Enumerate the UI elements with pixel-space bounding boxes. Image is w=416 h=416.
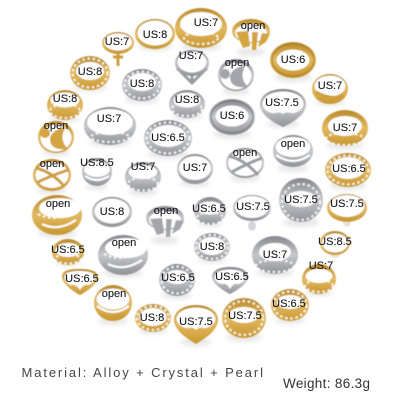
ring: silver US:7 cross pendant (175, 50, 209, 83)
ring: gold open wrap (33, 158, 71, 194)
ring: silver US:6.5 crown: US:6.5 (161, 272, 195, 284)
ring: silver open leaf: open (112, 237, 136, 249)
ring: gold US:8.5 pearl (318, 231, 352, 258)
ring: gold US:6.5 V shape (62, 269, 99, 295)
ring: silver open moon: open (225, 57, 249, 69)
ring: silver US:7 cross pendant: US:7 (179, 50, 203, 62)
ring: silver open double band: open (281, 138, 305, 150)
ring: silver US:6 wide band: US:6 (220, 110, 244, 122)
ring: silver US:8 crown (194, 233, 230, 263)
ring: gold US:6.5 crown: US:6.5 (272, 298, 306, 310)
ring: silver US:7 chain band (252, 236, 298, 277)
ring: silver US:8.5 (80, 157, 114, 190)
ring: silver US:7: US:7 (183, 162, 207, 174)
ring: gold open leaf (32, 195, 82, 238)
ring: gold US:8.5 pearl: US:8.5 (318, 236, 352, 248)
ring: silver open moon (218, 57, 254, 95)
ring: silver US:7 crown: US:7 (131, 161, 155, 173)
ring: silver US:8 thin: US:8 (100, 206, 124, 218)
ring: silver US:7: US:7 (97, 113, 121, 125)
ring: silver open leaf (98, 235, 148, 278)
ring: silver US:6.5 V shape (212, 267, 249, 294)
ring: silver US:6.5: US:6.5 (151, 132, 185, 144)
ring: gold US:7.5 pearl (327, 194, 367, 227)
ring: silver US:7.5 chain wide (279, 178, 323, 227)
ring: gold open butterfly (232, 19, 270, 56)
ring: gold US:7.5 pearl: US:7.5 (330, 198, 364, 210)
ring: silver US:8 (169, 90, 205, 120)
ring: gold US:7 heart top (175, 8, 227, 51)
ring: silver US:6.5 small (192, 197, 226, 227)
ring: gold US:8 thin (135, 19, 175, 51)
ring: silver US:8 chain: US:8 (130, 78, 154, 90)
ring: silver US:7 (177, 154, 213, 187)
ring: gold US:7 heart top: US:7 (194, 17, 218, 29)
ring: gold US:8 crown: US:8 (53, 93, 77, 105)
ring: gold US:6 wide band (270, 42, 316, 82)
ring: gold US:8 thin: US:8 (143, 29, 167, 41)
ring: silver US:7.5 pearl (233, 195, 271, 231)
ring: silver US:6.5 V shape: US:6.5 (215, 271, 249, 283)
ring: silver US:8.5: US:8.5 (80, 157, 114, 169)
ring: gold open butterfly: open (241, 20, 265, 32)
ring: silver US:7.5 chain wide: US:7.5 (284, 194, 318, 206)
ring: gold US:6.5 (325, 153, 371, 190)
ring: silver US:7 chain band: US:7 (263, 249, 287, 261)
ring: gold US:7 leaf (312, 74, 348, 106)
ring: gold US:7 crown eye (302, 260, 336, 296)
ring: gold US:8: US:8 (140, 312, 164, 324)
ring: silver US:7 crown (125, 161, 161, 196)
ring: gold US:8 (135, 304, 171, 334)
ring: gold US:7 cross pendant: US:7 (105, 36, 129, 48)
ring: gold open moon (38, 120, 74, 156)
ring: silver US:8: US:8 (175, 94, 199, 106)
ring: gold US:6.5 V shape: US:6.5 (65, 273, 99, 285)
ring: silver US:6.5 (144, 120, 192, 159)
ring: gold US:8 chain: US:8 (78, 66, 102, 78)
ring: gold US:7.5 chain wide: US:7.5 (228, 310, 262, 322)
ring: gold US:8 crown (47, 90, 83, 122)
ring: gold US:7.5 heart (174, 305, 218, 346)
ring: gold US:7 chain band (322, 110, 368, 150)
ring: silver US:6 wide band (209, 99, 255, 139)
ring: silver US:7.5 heart (260, 89, 306, 128)
ring: gold open wrap: open (40, 158, 64, 170)
caption: weight: Weight: 86.3g (283, 376, 370, 391)
ring: silver US:6.5 crown (159, 264, 195, 299)
ring: gold US:7.5 heart: US:7.5 (179, 316, 213, 328)
ring: silver US:7.5 heart: US:7.5 (265, 97, 299, 109)
ring: gold US:6.5: US:6.5 (332, 163, 366, 175)
ring: gold US:6 wide band: US:6 (281, 54, 305, 66)
ring: gold US:7 cross pendant (102, 32, 134, 66)
ring: silver US:8 crown: US:8 (200, 241, 224, 253)
ring: gold US:6.5 crown (271, 289, 309, 324)
ring: silver US:8 chain (122, 69, 162, 104)
ring: gold US:7 leaf: US:7 (318, 80, 342, 92)
ring: gold open double band: open (102, 288, 126, 300)
ring: gold open moon: open (44, 120, 68, 132)
caption: material: Material: Alloy + Crystal + Pearl (22, 365, 263, 380)
ring: silver US:8 thin (92, 197, 132, 227)
ring: gold US:6.5 small (51, 239, 85, 266)
ring: gold open leaf: open (46, 198, 70, 210)
ring: silver open wrap (226, 147, 264, 182)
ring: gold US:7 crown eye: US:7 (309, 260, 333, 272)
ring: silver open butterfly: open (154, 205, 178, 217)
ring: silver open wrap: open (233, 147, 257, 159)
ring: gold open double band (94, 285, 132, 325)
ring: silver US:7.5 pearl: US:7.5 (236, 201, 270, 213)
ring: silver US:6.5 small: US:6.5 (192, 203, 226, 215)
ring: gold US:7 chain band: US:7 (333, 122, 357, 134)
ring: silver open double band (273, 135, 313, 172)
ring: silver US:7 (84, 107, 136, 147)
ring: gold US:6.5 small: US:6.5 (51, 244, 85, 256)
ring: gold US:8 chain (70, 56, 110, 92)
ring: gold US:7.5 chain wide (222, 298, 266, 342)
ring: silver open butterfly (146, 205, 184, 244)
